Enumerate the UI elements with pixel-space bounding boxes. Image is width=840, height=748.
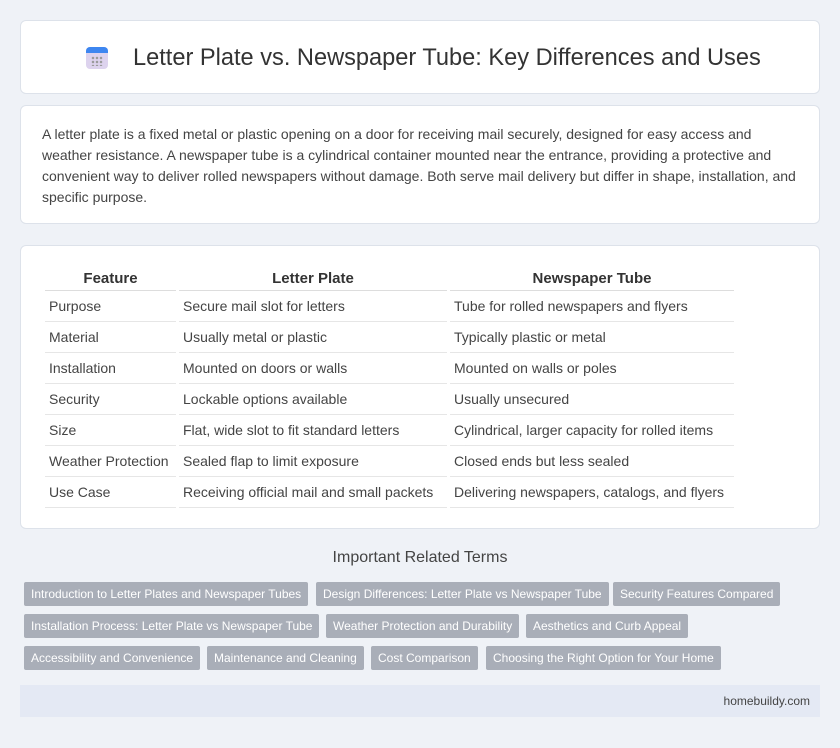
footer: homebuildy.com <box>724 694 810 708</box>
related terms tags: Cost Comparison <box>378 651 471 665</box>
related terms tags: Weather Protection and Durability <box>333 619 512 633</box>
related terms tags: Design Differences: Letter Plate vs Newspaper Tube <box>323 587 602 601</box>
comparison table: Feature <box>83 270 138 286</box>
comparison table: Receiving official mail and small packets <box>183 484 433 500</box>
description card <box>20 105 820 224</box>
table card <box>20 245 820 529</box>
comparison table: Size <box>49 422 76 438</box>
comparison table: Security <box>49 391 100 407</box>
comparison table: Closed ends but less sealed <box>454 453 629 469</box>
related terms tags: Aesthetics and Curb Appeal <box>533 619 681 633</box>
related terms tags: Security Features Compared <box>620 587 773 601</box>
related terms tags: Choosing the Right Option for Your Home <box>493 651 714 665</box>
comparison table: Flat, wide slot to fit standard letters <box>183 422 399 438</box>
comparison table: Sealed flap to limit exposure <box>183 453 359 469</box>
related terms tags: Installation Process: Letter Plate vs Newspaper Tube <box>31 619 312 633</box>
title: Letter Plate vs. Newspaper Tube: Key Differences and Uses <box>133 45 761 71</box>
comparison table: Cylindrical, larger capacity for rolled items <box>454 422 713 438</box>
comparison table: Mounted on walls or poles <box>454 360 617 376</box>
comparison table: Usually metal or plastic <box>183 329 327 345</box>
related terms tags: Introduction to Letter Plates and Newspaper Tubes <box>31 587 301 601</box>
comparison table: Material <box>49 329 99 345</box>
comparison table: Tube for rolled newspapers and flyers <box>454 298 688 314</box>
icon: calendar <box>86 47 108 69</box>
related terms tags: Maintenance and Cleaning <box>214 651 357 665</box>
comparison table: Letter Plate <box>272 270 354 286</box>
comparison table: Weather Protection <box>49 453 169 469</box>
header card <box>20 20 820 94</box>
comparison table: Typically plastic or metal <box>454 329 606 345</box>
comparison table: Installation <box>49 360 116 376</box>
comparison table: Mounted on doors or walls <box>183 360 347 376</box>
comparison table: Newspaper Tube <box>533 270 651 286</box>
comparison table: Usually unsecured <box>454 391 569 407</box>
comparison table: Secure mail slot for letters <box>183 298 345 314</box>
related terms tags: Accessibility and Convenience <box>31 651 193 665</box>
comparison table: Lockable options available <box>183 391 347 407</box>
comparison table: Use Case <box>49 484 110 500</box>
related terms heading: Important Related Terms <box>333 549 507 566</box>
description text: A letter plate is a fixed metal or plastic opening on a door for receiving mail securely, designed for easy access and weather resistance. A newspaper tube is a cylindrical container mounted near the entrance, providing a protective and convenient way to deliver rolled newspapers without damage. Both serve mail delivery but differ in shape, installation, and specific purpose. <box>42 126 796 205</box>
comparison table: Delivering newspapers, catalogs, and flyers <box>454 484 724 500</box>
comparison table: Purpose <box>49 298 101 314</box>
comparison table <box>45 270 734 508</box>
footer <box>20 685 820 717</box>
